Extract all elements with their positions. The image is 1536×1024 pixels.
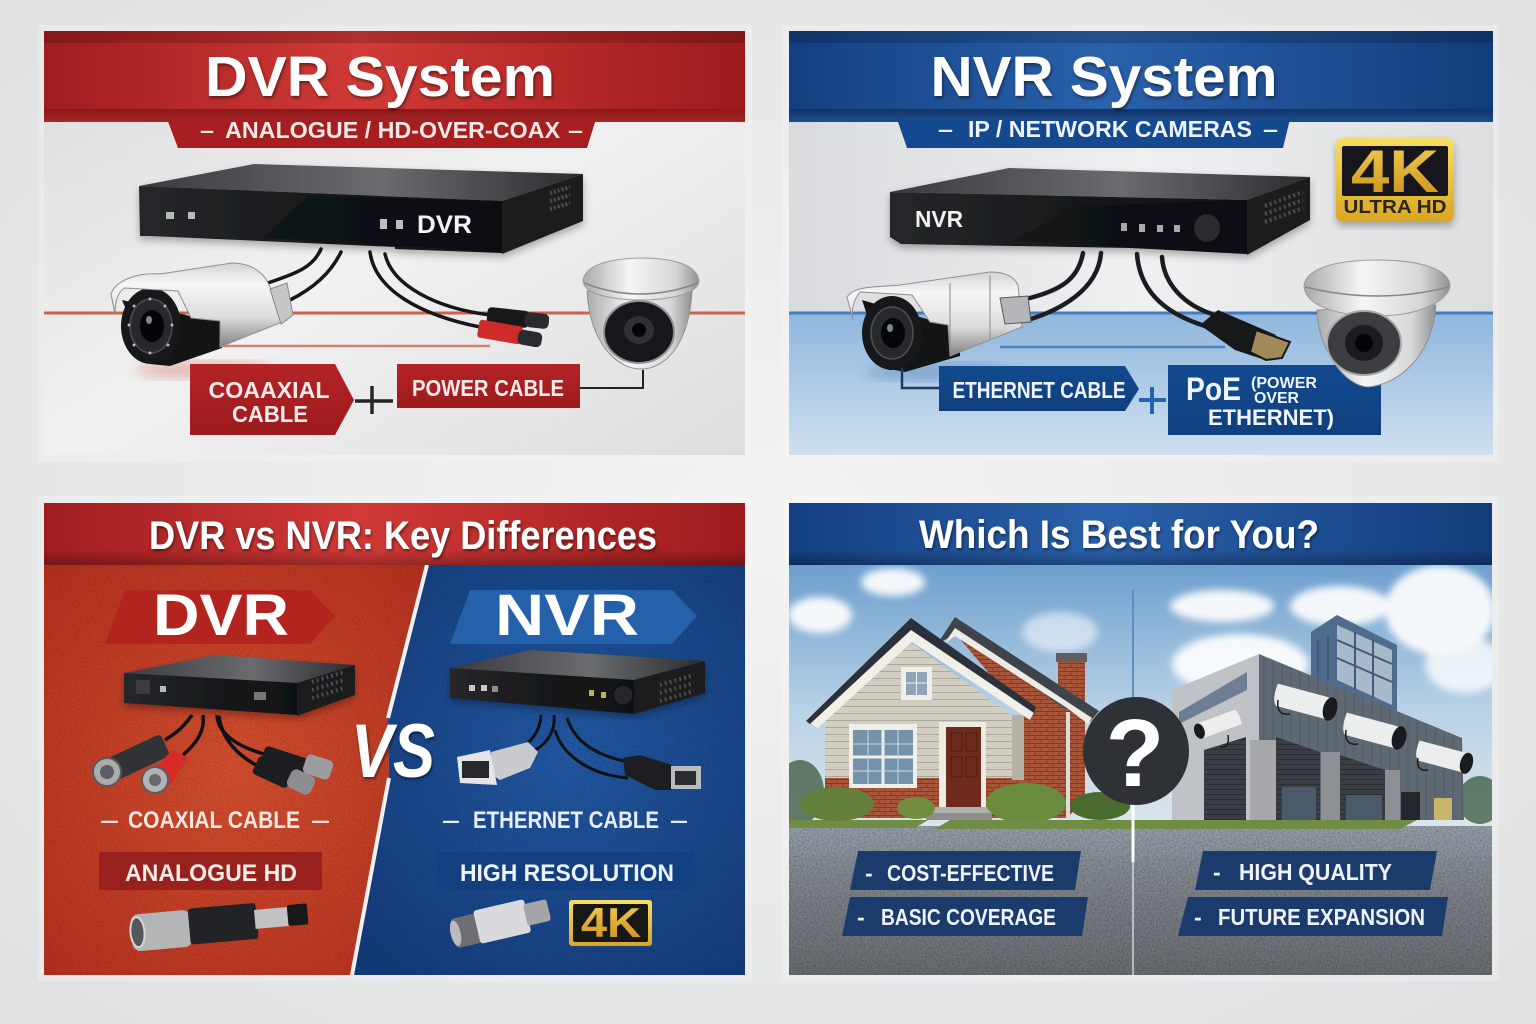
panel: NVR system: [782, 25, 1499, 462]
label: ethernet cable: ETHERNET CABLE: [952, 377, 1126, 403]
label: cost-effective: COST-EFFECTIVE: [887, 860, 1054, 886]
NVR recorder: NVR: [915, 206, 963, 232]
icon: plus: [1139, 387, 1166, 414]
label: ethernet cable: [939, 366, 1139, 411]
subtitle ribbon: –: [568, 118, 583, 143]
power connector line: [580, 370, 643, 388]
cables: DVR: [165, 715, 268, 765]
label: coaxial cable: COAXIAL CABLE: [128, 807, 300, 834]
shrubs: [800, 783, 1130, 823]
cables: NVR: [525, 715, 628, 778]
4K badge: 4K: [581, 899, 641, 946]
divider: [352, 565, 427, 975]
label: cost-effective: [850, 851, 1081, 890]
DVR recorder: [139, 164, 583, 254]
label: coaxial cable: –: [311, 808, 330, 833]
label: future expansion: -: [1194, 904, 1202, 930]
label: high resolution: [437, 852, 695, 890]
panel: DVR system: [38, 25, 752, 462]
heading: which is best: [789, 503, 1492, 565]
sky: [788, 565, 1505, 830]
heading: DVR vs NVR: DVR vs NVR: Key Differences: [149, 514, 657, 558]
NVR mini recorder: [450, 650, 705, 714]
subtitle ribbon: –: [938, 117, 953, 142]
4K badge: [569, 899, 652, 946]
heading: DVR vs NVR: [44, 503, 745, 565]
label: basic coverage: -: [857, 904, 865, 930]
connector: black plug: [486, 307, 550, 329]
subtitle ribbon: [167, 117, 596, 148]
panel: key differences: [38, 496, 752, 981]
icon: plus: [355, 386, 393, 414]
camera 3: [1340, 712, 1409, 751]
label: coaxial cable: [190, 364, 354, 435]
label: coaxial cable: CABLE: [232, 401, 308, 427]
label: power cable: [397, 364, 580, 408]
icon: VS: VS: [351, 709, 435, 794]
4K Ultra HD badge: ULTRA HD: [1344, 197, 1446, 217]
cables: DVR: [265, 249, 490, 327]
icon: dome camera: [583, 258, 699, 369]
heading: DVR System: DVR System: [205, 45, 555, 109]
red side: [44, 565, 429, 975]
label: analogue HD: ANALOGUE HD: [125, 860, 297, 887]
label: ethernet cable: –: [670, 808, 688, 833]
label: ethernet cable: –: [442, 808, 460, 833]
cables: NVR: [1028, 253, 1212, 326]
NVR recorder: [890, 168, 1310, 255]
camera 2: [1271, 683, 1340, 722]
connector: red plug: [477, 319, 543, 348]
label: future expansion: [1178, 897, 1448, 936]
connectors: DVR: [93, 734, 334, 797]
label: power cable: POWER CABLE: [412, 375, 564, 401]
label: high resolution: HIGH RESOLUTION: [460, 860, 674, 887]
subtitle ribbon: [897, 116, 1290, 148]
4K Ultra HD badge: 4K: [1351, 138, 1439, 205]
icon: question mark: [1083, 697, 1189, 807]
label: high quality: HIGH QUALITY: [1239, 859, 1392, 885]
label: PoE: OVER: [1254, 390, 1299, 407]
banner: NVR: NVR: [495, 583, 639, 648]
icon: BNC connector: [129, 898, 309, 952]
heading: NVR System: [789, 31, 1493, 122]
divider line: [1132, 590, 1134, 698]
label: basic coverage: BASIC COVERAGE: [881, 904, 1056, 930]
connector line: [902, 368, 939, 388]
DVR mini recorder: [124, 655, 355, 716]
label: cost-effective: -: [865, 860, 873, 886]
connector: ethernet plug: [1200, 310, 1290, 360]
icon: dome camera: [1304, 260, 1450, 387]
label: PoE: PoE: [1186, 371, 1241, 407]
road: [789, 826, 1492, 975]
trees: [776, 760, 1502, 824]
banner: NVR: [450, 583, 697, 648]
label: high quality: [1195, 851, 1437, 890]
icon: bullet camera: [111, 263, 293, 366]
icon: commercial building: [1172, 615, 1464, 820]
lawn: [789, 820, 1417, 829]
blue side: [352, 565, 745, 975]
label: ethernet cable: ETHERNET CABLE: [473, 807, 659, 834]
subtitle ribbon: IP / NETWORK CAMERAS: [968, 116, 1252, 142]
label: PoE: (POWER: [1251, 375, 1317, 392]
label: coaxial cable: COAAXIAL: [208, 377, 330, 403]
icon: security cameras: [1192, 683, 1475, 775]
label: coaxial cable: –: [100, 808, 119, 833]
subtitle ribbon: –: [200, 118, 214, 143]
camera 4: [1414, 739, 1475, 775]
label: future expansion: FUTURE EXPANSION: [1218, 904, 1425, 930]
icon: bullet camera: [847, 272, 1031, 372]
icon: house: [800, 617, 1130, 823]
subtitle ribbon: –: [1263, 117, 1278, 142]
DVR recorder: DVR: [417, 211, 472, 239]
camera 1: [1192, 709, 1242, 740]
heading: which is best: Which Is Best for You?: [919, 513, 1319, 557]
connectors: NVR: [457, 742, 701, 790]
icon: silver connector: [447, 894, 553, 950]
4K Ultra HD badge: [1336, 138, 1454, 222]
label: analogue HD: [99, 852, 322, 890]
subtitle ribbon: ANALOGUE / HD-OVER-COAX: [225, 117, 561, 143]
panel: which is best: [776, 496, 1505, 981]
label: high quality: -: [1213, 859, 1221, 885]
label: PoE: [1168, 365, 1381, 435]
icon: question mark: ?: [1106, 700, 1164, 807]
label: PoE: ETHERNET): [1208, 405, 1334, 430]
label: basic coverage: [842, 897, 1088, 936]
heading: DVR System: [44, 31, 745, 122]
heading: NVR System: NVR System: [930, 45, 1278, 109]
banner: DVR: [105, 583, 335, 648]
pin line: [1132, 805, 1134, 862]
banner: DVR: DVR: [153, 583, 289, 648]
